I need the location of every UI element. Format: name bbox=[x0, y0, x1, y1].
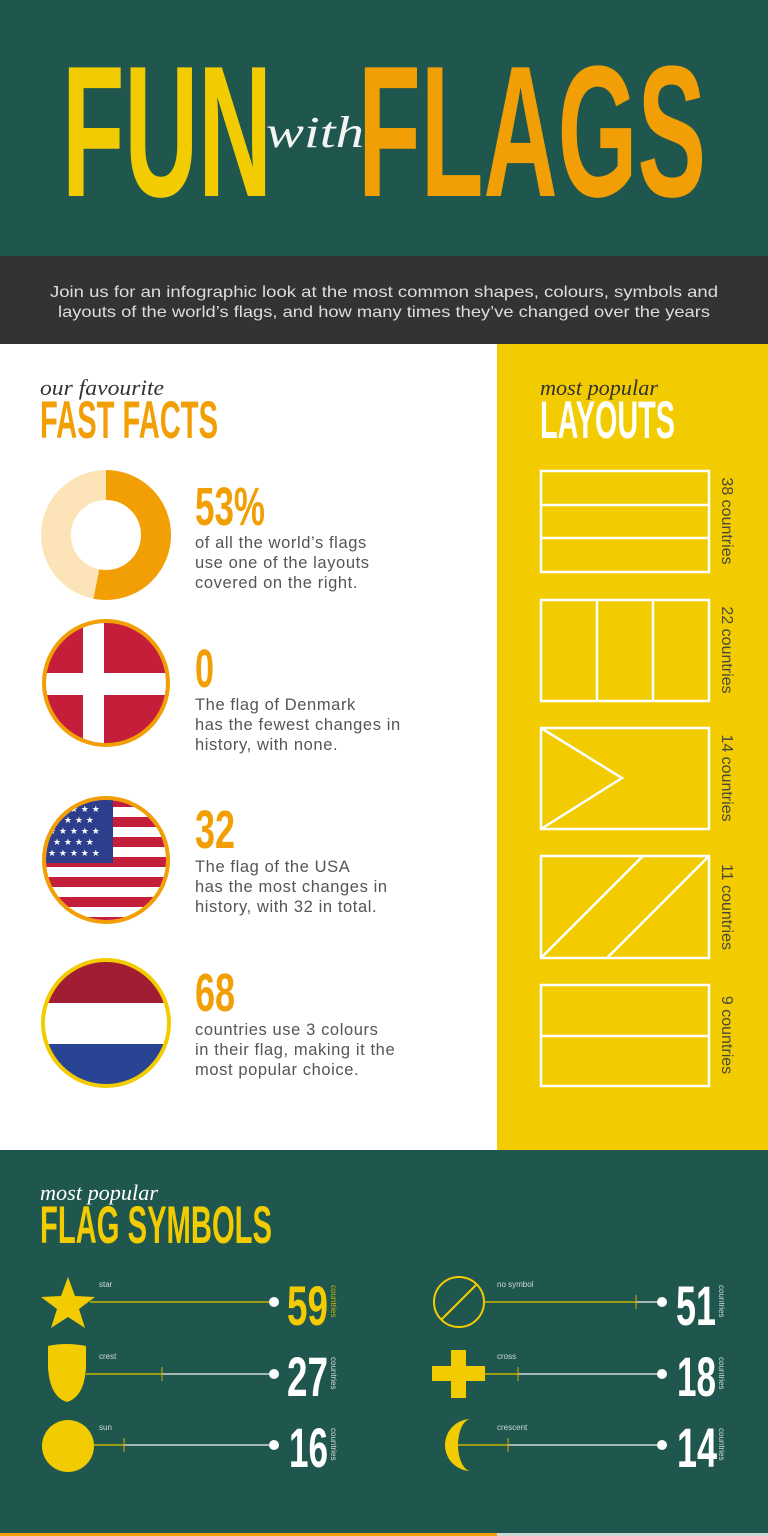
fact: 53%: covered on the right. bbox=[195, 574, 358, 592]
donut chart 53% bbox=[56, 485, 156, 585]
symbol row: cross 18: countries bbox=[717, 1357, 726, 1389]
symbol row: crescent 14: crescent bbox=[497, 1423, 528, 1432]
panel: fast facts bbox=[40, 379, 400, 1088]
layout labels bbox=[718, 477, 735, 1074]
symbol row: cross 18: cross bbox=[497, 1352, 516, 1361]
symbol row: crest 27: crest bbox=[99, 1352, 117, 1361]
fact: 68: most popular choice. bbox=[195, 1061, 359, 1079]
symbol row: star 59: 59 bbox=[287, 1274, 328, 1337]
layout labels: 22 countries bbox=[718, 606, 735, 694]
fact: 53%: use one of the layouts bbox=[195, 554, 370, 572]
heading: fast facts: our favourite bbox=[40, 375, 164, 400]
fact: 0: The flag of Denmark bbox=[195, 696, 356, 714]
symbol row: no symbol 51: 51 bbox=[676, 1274, 716, 1337]
symbol row: crescent 14 bbox=[445, 1416, 726, 1479]
fact: 0: has the fewest changes in bbox=[195, 716, 401, 734]
symbol row: sun 16 bbox=[42, 1416, 338, 1479]
heading: flag symbols: most popular bbox=[40, 1180, 158, 1205]
symbol row: crest 27 bbox=[48, 1344, 338, 1408]
symbol row: crescent 14: 14 bbox=[677, 1416, 717, 1479]
symbol row: star 59: countries bbox=[329, 1285, 338, 1317]
icon: Netherlands flag bbox=[40, 958, 172, 1088]
symbol row: cross 18: 18 bbox=[677, 1345, 716, 1408]
fact: 32: 32 bbox=[195, 800, 235, 860]
layout labels: 11 countries bbox=[718, 864, 735, 950]
symbol row: no symbol 51: no symbol bbox=[497, 1280, 534, 1289]
symbol row: star 59: star bbox=[99, 1280, 113, 1289]
panel: flag symbols bbox=[0, 1150, 768, 1536]
title: FUN: FUN bbox=[62, 27, 272, 236]
icon: USA flag: ★ ★ ★ ★ ★ bbox=[48, 805, 100, 815]
heading: flag symbols: FLAG SYMBOLS bbox=[40, 1196, 272, 1255]
fact: 32: history, with 32 in total. bbox=[195, 898, 377, 916]
fact: 53% bbox=[195, 477, 370, 592]
icon: USA flag: ★ ★ ★ ★ ★ bbox=[48, 827, 100, 837]
heading: layouts bbox=[540, 375, 675, 450]
symbol row: crest 27: 27 bbox=[287, 1345, 328, 1408]
symbol row: no symbol 51 bbox=[434, 1274, 726, 1337]
fact: 68: 68 bbox=[195, 963, 235, 1023]
symbol row: sun 16: countries bbox=[329, 1428, 338, 1460]
icon: Denmark flag bbox=[40, 619, 172, 750]
symbol row: star 59 bbox=[41, 1274, 338, 1337]
symbol row: crest 27: countries bbox=[329, 1357, 338, 1389]
fact: 53%: of all the world’s flags bbox=[195, 534, 367, 552]
fact: 0: 0 bbox=[195, 639, 214, 699]
layout labels: 14 countries bbox=[718, 734, 735, 822]
intro band: layouts of the world’s flags, and how many times they’ve changed over the years bbox=[58, 304, 710, 321]
panel: layouts bbox=[497, 344, 768, 1150]
symbol row: sun 16: 16 bbox=[289, 1416, 328, 1479]
heading: layouts: most popular bbox=[540, 375, 658, 400]
icon: USA flag: ★ ★ ★ ★ bbox=[53, 838, 94, 848]
fact: 68: in their flag, making it the bbox=[195, 1041, 395, 1059]
layout labels: 9 countries bbox=[718, 996, 735, 1074]
fact: 0: history, with none. bbox=[195, 736, 338, 754]
icon: USA flag bbox=[40, 796, 172, 927]
fact: 32 bbox=[195, 800, 388, 916]
symbol row: cross 18 bbox=[432, 1345, 726, 1408]
heading: fast facts bbox=[40, 375, 218, 450]
layout: horizontal triband bbox=[541, 471, 709, 572]
symbol row: crescent 14: countries bbox=[717, 1428, 726, 1460]
fact: 32: The flag of the USA bbox=[195, 858, 350, 876]
intro band bbox=[0, 256, 768, 344]
icon: USA flag: ★ ★ ★ ★ ★ bbox=[48, 849, 100, 859]
symbol row: no symbol 51: countries bbox=[717, 1285, 726, 1317]
fact: 0 bbox=[195, 639, 401, 754]
title: with: with bbox=[266, 108, 364, 157]
layout: vertical triband bbox=[541, 600, 709, 701]
icon: USA flag: ★ ★ ★ ★ bbox=[53, 816, 94, 826]
header panel bbox=[0, 0, 768, 256]
heading: flag symbols bbox=[40, 1180, 272, 1255]
fact: 68 bbox=[195, 963, 395, 1079]
layout: diagonal bbox=[541, 856, 709, 958]
fact: 68: countries use 3 colours bbox=[195, 1021, 378, 1039]
intro band: Join us for an infographic look at the most common shapes, colours, symbols and bbox=[50, 284, 718, 301]
layout labels: 38 countries bbox=[718, 477, 735, 565]
fact: 32: has the most changes in bbox=[195, 878, 388, 896]
layout: bicolour bbox=[541, 985, 709, 1086]
fact: 53%: 53% bbox=[195, 477, 265, 537]
layout: chevron bbox=[541, 728, 709, 829]
heading: fast facts: FAST FACTS bbox=[40, 391, 218, 450]
symbol row: sun 16: sun bbox=[99, 1423, 112, 1432]
